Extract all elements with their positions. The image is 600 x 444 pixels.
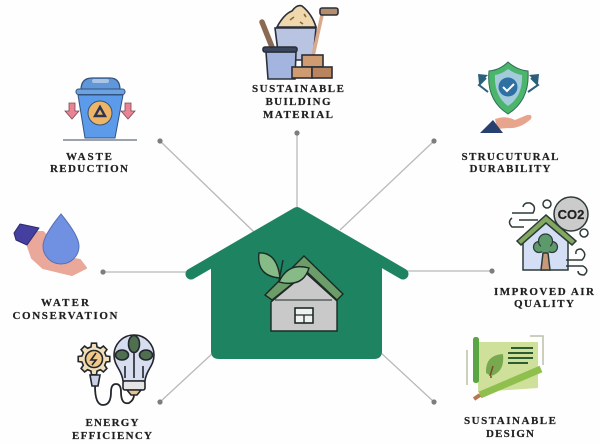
label: sustainable building material: MATERIAL — [263, 109, 333, 121]
label: structural durability: STRUCUTURAL — [462, 151, 558, 163]
label: energy efficiency: EFFICIENCY — [72, 430, 152, 442]
label: structural durability — [462, 151, 558, 175]
text: CO2 in cloud: CO2 — [558, 207, 584, 222]
label: water conservation: CONSERVATION — [12, 310, 118, 322]
label: improved air quality: QUALITY — [514, 298, 574, 310]
icon: sustainable building material — [262, 6, 338, 79]
icon: energy efficiency gear and bulb — [78, 335, 154, 405]
connector lines — [100, 130, 495, 405]
label: energy efficiency: ENERGY — [86, 417, 139, 429]
icon: improved air quality house — [510, 197, 588, 275]
label: waste reduction — [50, 151, 128, 175]
label: waste reduction: REDUCTION — [50, 163, 128, 175]
central green house — [191, 212, 403, 359]
label: structural durability: DURABILITY — [470, 163, 551, 175]
label: sustainable building material — [252, 83, 344, 121]
label: water conservation — [12, 297, 118, 322]
label: sustainable building material: BUILDING — [266, 96, 331, 108]
label: energy efficiency — [72, 417, 152, 442]
label: sustainable building material: SUSTAINABLE — [252, 83, 344, 95]
label: sustainable design — [464, 415, 556, 440]
label: waste reduction: WASTE — [66, 151, 112, 163]
icon: structural durability shield — [478, 62, 539, 133]
label: sustainable design: DESIGN — [486, 428, 534, 440]
label: water conservation: WATER — [41, 297, 90, 309]
label: improved air quality — [494, 286, 595, 310]
label: sustainable design: SUSTAINABLE — [464, 415, 556, 427]
small house icon — [259, 253, 343, 331]
icon: waste reduction bin — [63, 78, 137, 140]
label: improved air quality: IMPROVED AIR — [494, 286, 595, 298]
icon: sustainable design blueprint — [467, 336, 543, 399]
icon: water conservation hand and drop — [14, 214, 86, 275]
